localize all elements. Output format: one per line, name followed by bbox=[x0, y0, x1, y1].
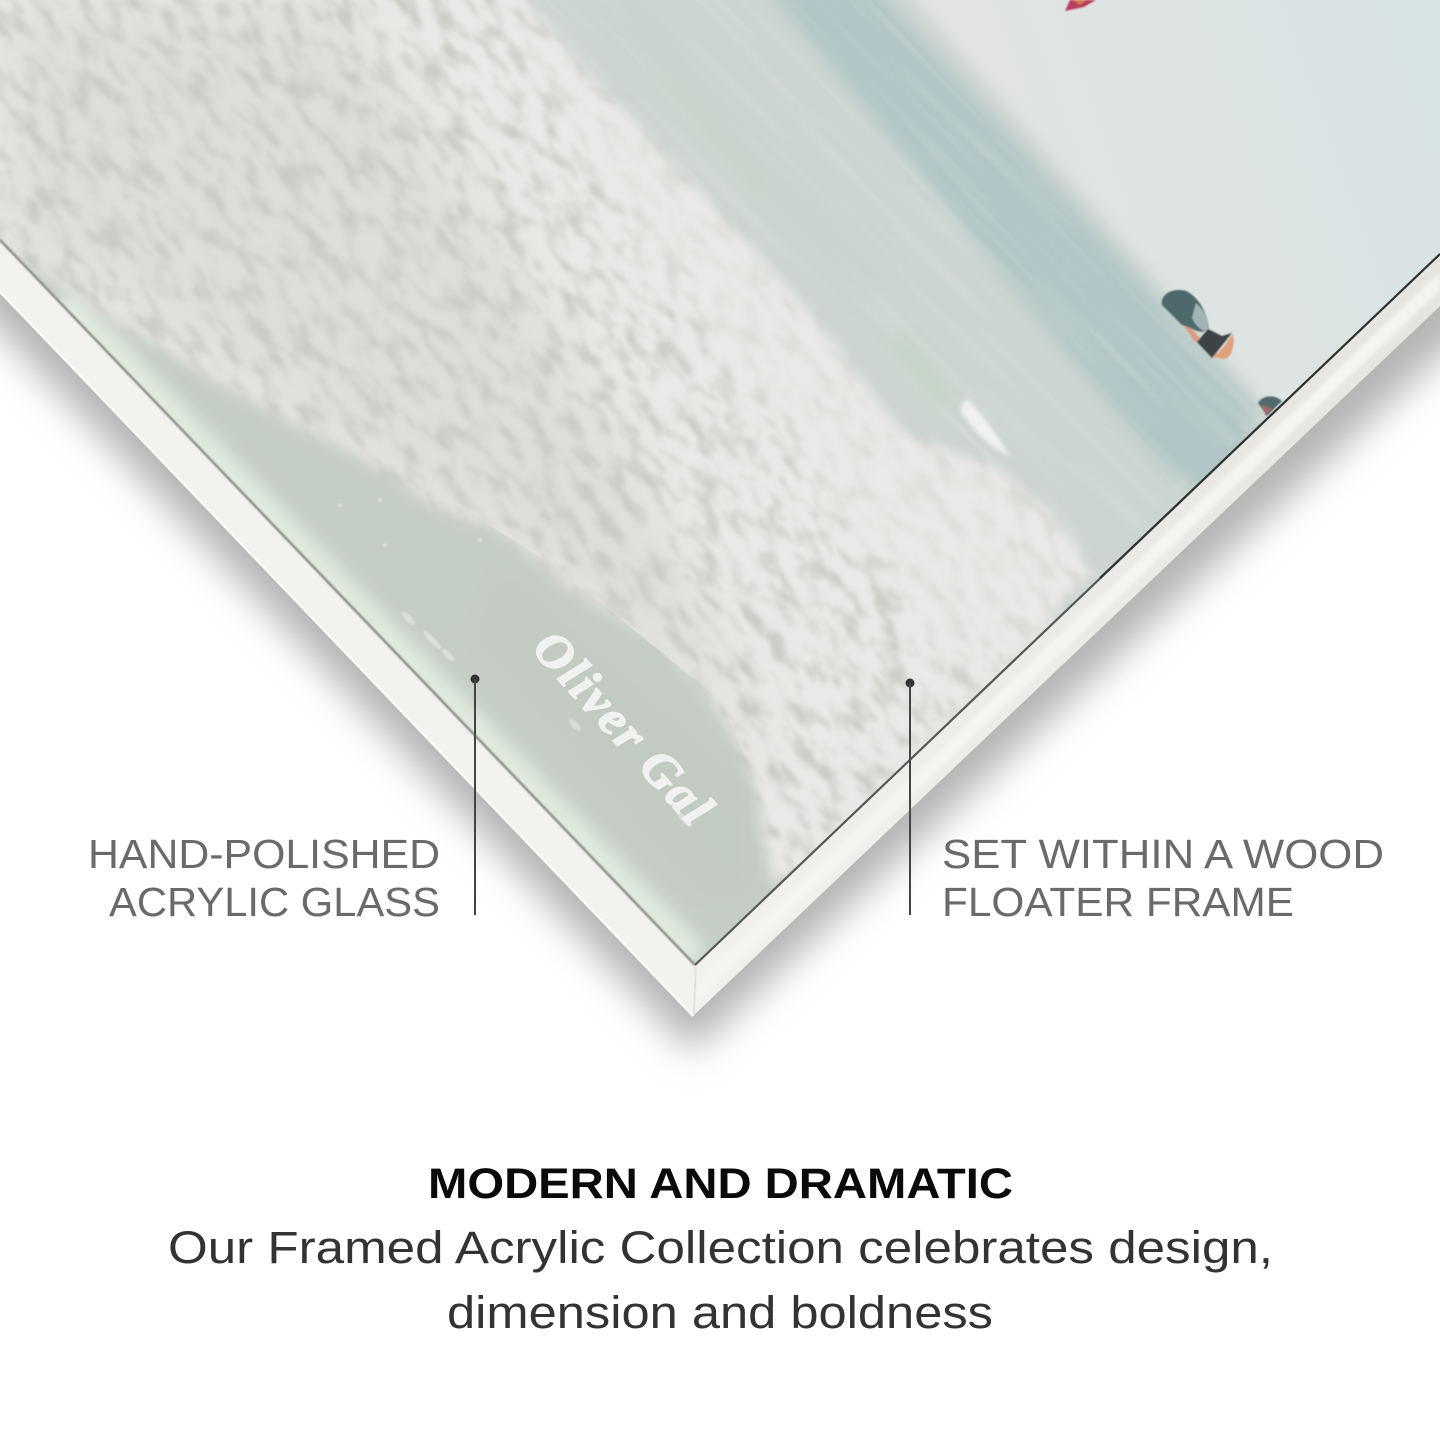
wave crest streak bbox=[960, 398, 1010, 456]
foam body bbox=[0, 0, 1173, 1086]
artist signature: Oliver Gal bbox=[522, 619, 725, 835]
callout marker and leader line bbox=[906, 678, 914, 915]
callout text: HAND-POLISHED bbox=[88, 831, 440, 877]
frame corner miter bbox=[694, 967, 696, 1014]
callout text: ACRYLIC GLASS bbox=[109, 879, 440, 925]
callout: hand-polished acrylic glass bbox=[88, 674, 480, 925]
callout text bbox=[88, 831, 440, 925]
frame: left side bbox=[0, 240, 695, 1016]
photograph: beach from above bbox=[0, 0, 1440, 964]
description text bbox=[168, 1222, 1273, 1338]
glass edge shadow lines bbox=[0, 240, 695, 965]
callout text bbox=[942, 831, 1384, 925]
blue-teal distant sea bbox=[752, 0, 1256, 500]
green shallow water along the lower edge bbox=[11, 248, 794, 963]
kite: red bbox=[1065, 0, 1096, 11]
callout text: FLOATER FRAME bbox=[942, 879, 1294, 925]
framed acrylic artwork bbox=[0, 0, 1440, 1086]
pale rim along the glass edge bbox=[60, 300, 695, 960]
sea surface streaks bbox=[882, 19, 1235, 444]
frame drop shadow bbox=[0, 230, 1440, 1052]
sky area bbox=[488, 0, 1440, 868]
frame highlight stripe bbox=[697, 272, 1440, 1000]
distant umbrella at frame edge bbox=[1258, 396, 1282, 416]
darker foam shade bbox=[0, 0, 780, 800]
frame: right side bbox=[693, 254, 1440, 1016]
beach umbrella and figures bbox=[1162, 290, 1234, 359]
green water tints bbox=[899, 342, 944, 402]
heading: MODERN AND DRAMATIC bbox=[428, 1160, 1013, 1208]
callout marker and leader line bbox=[470, 674, 480, 915]
water sparkle bbox=[338, 498, 694, 829]
foam speckle texture bbox=[0, 0, 1173, 1086]
description text: dimension and boldness bbox=[447, 1287, 993, 1338]
frame lower-left lip bbox=[0, 292, 693, 1016]
description text: Our Framed Acrylic Collection celebrates design, bbox=[168, 1222, 1273, 1273]
callout: wood floater frame bbox=[906, 678, 1384, 925]
callout text: SET WITHIN A WOOD bbox=[942, 831, 1384, 877]
pale sea band bbox=[480, 0, 1275, 640]
grey-green shade mid water bbox=[470, 560, 760, 900]
